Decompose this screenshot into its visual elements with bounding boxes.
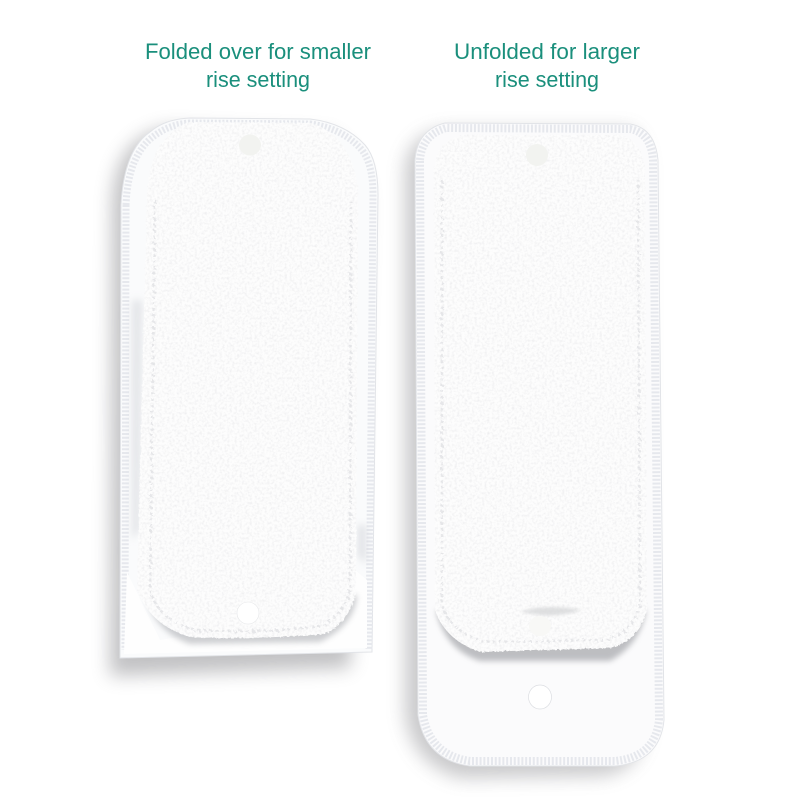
snap: fabric bottom [528, 685, 552, 709]
title: left caption: Folded over for smaller [145, 39, 371, 64]
snap: folded top [239, 134, 261, 156]
shadow: folded insert [110, 128, 365, 676]
title: left caption: rise setting [206, 67, 310, 92]
title: right caption [454, 39, 640, 92]
outer fabric: unfolded insert [415, 123, 664, 766]
snap: terry bottom [529, 616, 551, 636]
outer fabric: folded insert [120, 118, 378, 658]
title: right caption: Unfolded for larger [454, 39, 640, 64]
title: right caption: rise setting [495, 67, 599, 92]
title: left caption [145, 39, 371, 92]
terry pad shadow: folded insert [145, 595, 357, 644]
panel: folded insert [110, 118, 378, 676]
terry pad: unfolded insert [434, 135, 647, 652]
terry pad: folded insert [137, 122, 358, 638]
overlock stitching: unfolded insert [420, 128, 659, 761]
folded flap: folded insert [124, 570, 367, 654]
fold shadow strips: folded insert [132, 300, 142, 540]
terry edge: unfolded insert [442, 180, 640, 642]
shadow: unfolded insert [405, 130, 645, 778]
snap: folded bottom [237, 602, 259, 624]
fold shadow strip: folded insert right [358, 525, 366, 565]
terry pad shadow: unfolded insert [436, 610, 646, 661]
terry edge: folded insert [150, 200, 351, 631]
panel: unfolded insert [405, 123, 664, 778]
snap: unfolded top [526, 144, 548, 166]
overlock stitching: folded insert [125, 123, 373, 650]
terry crease above snap [520, 607, 582, 615]
